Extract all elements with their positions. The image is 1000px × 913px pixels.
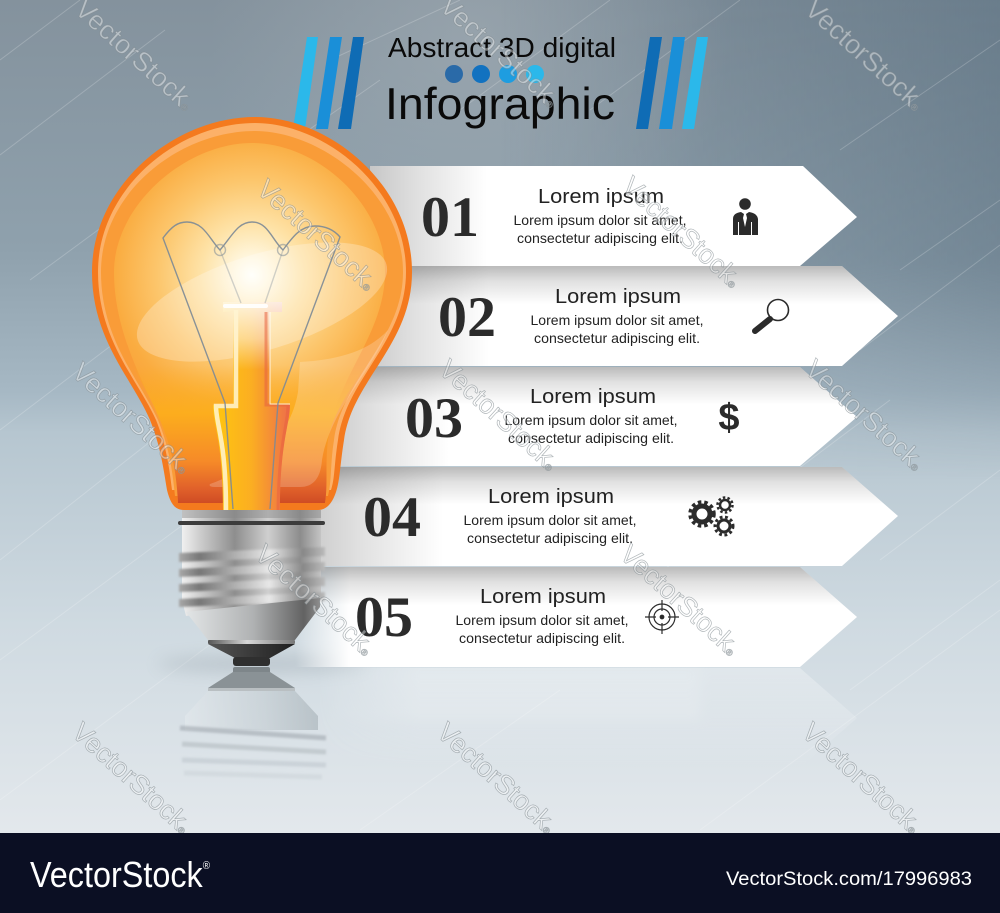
glass highlight ellipse [124, 218, 400, 386]
glass orange band [101, 131, 403, 496]
floor shadow under bulb [157, 655, 367, 673]
ribbon 3 content: consectetur adipiscing elit. [508, 430, 674, 446]
watermarks: VectorStock® [66, 717, 198, 840]
glass peach rim [98, 123, 406, 490]
ribbon 3 content: 03 [405, 387, 463, 450]
ribbon 4 [300, 467, 898, 566]
ribbon 1 content: Lorem ipsum [538, 185, 664, 208]
ribbon 3 [320, 367, 857, 466]
ribbon 1 content [421, 185, 686, 249]
title stripes right [636, 37, 708, 129]
footer logo: VectorStock [30, 854, 222, 895]
ribbon 4 content: consectetur adipiscing elit. [467, 530, 633, 546]
ribbon 3 content [405, 385, 678, 450]
icon: gears [690, 498, 733, 535]
ribbon reflections on floor [367, 668, 837, 719]
watermarks: VectorStock® [616, 171, 748, 294]
ribbon 4 content: Lorem ipsum [488, 485, 614, 508]
ribbon 5 content: Lorem ipsum dolor sit amet, [456, 612, 628, 628]
ribbon 5 content: Lorem ipsum [480, 585, 606, 608]
glass body [114, 143, 385, 503]
ribbon 4 content: Lorem ipsum dolor sit amet, [464, 512, 636, 528]
glass stem [213, 302, 290, 510]
ribbon 5 content [355, 585, 628, 649]
watermarks: VectorStock® [251, 174, 383, 297]
ribbon 4 content: 04 [363, 486, 421, 549]
watermarks: VectorStock® [799, 354, 931, 477]
ribbon 1 [370, 166, 857, 266]
ribbon 5 [295, 567, 857, 667]
ribbon 1 content: consectetur adipiscing elit. [517, 230, 683, 246]
title stripes left [293, 37, 364, 129]
filament [163, 222, 340, 509]
ribbon 1 content: Lorem ipsum dolor sit amet, [514, 212, 686, 228]
footer url: VectorStock.com/17996983 [726, 869, 972, 890]
ribbon 2 content: 02 [438, 286, 496, 349]
title: Abstract 3D digital [388, 32, 616, 63]
footer bar [0, 833, 1000, 913]
ribbon 2 content: Lorem ipsum dolor sit amet, [530, 312, 704, 328]
ribbon 2 content [438, 285, 704, 349]
watermarks: VectorStock® [66, 357, 198, 480]
ribbon 1 content: 01 [421, 186, 479, 249]
title dots [445, 65, 544, 83]
light bulb [92, 117, 412, 666]
ribbon 2 content: consectetur adipiscing elit. [534, 330, 700, 346]
ribbon 4 content [363, 485, 636, 549]
icon: businessman [733, 198, 758, 235]
ribbon 5 content: 05 [355, 586, 413, 649]
ribbon 3 content: Lorem ipsum [530, 385, 656, 408]
lower right reflection [210, 330, 388, 487]
watermarks: VectorStock® [796, 717, 928, 840]
metal screw base [178, 510, 325, 666]
ribbon 2 content: Lorem ipsum [555, 285, 681, 308]
title: Infographic [385, 80, 615, 129]
watermarks: VectorStock® [431, 717, 563, 840]
ribbon 2 [360, 266, 898, 366]
glass lower shading [124, 350, 374, 503]
footer logo: ® [203, 860, 210, 872]
title [385, 32, 616, 129]
ribbon 5 content: consectetur adipiscing elit. [459, 630, 625, 646]
watermarks: VectorStock® [433, 354, 565, 477]
watermarks: VectorStock® [249, 539, 381, 662]
bulb reflection on floor [180, 667, 326, 777]
icon: dollar: $ [718, 397, 740, 439]
watermarks: VectorStock® [614, 539, 746, 662]
icon: magnifier [755, 300, 788, 331]
watermarks [66, 0, 931, 840]
glass outer edge [92, 117, 412, 510]
icon: target [645, 600, 679, 634]
ribbon 3 content: Lorem ipsum dolor sit amet, [504, 412, 678, 428]
